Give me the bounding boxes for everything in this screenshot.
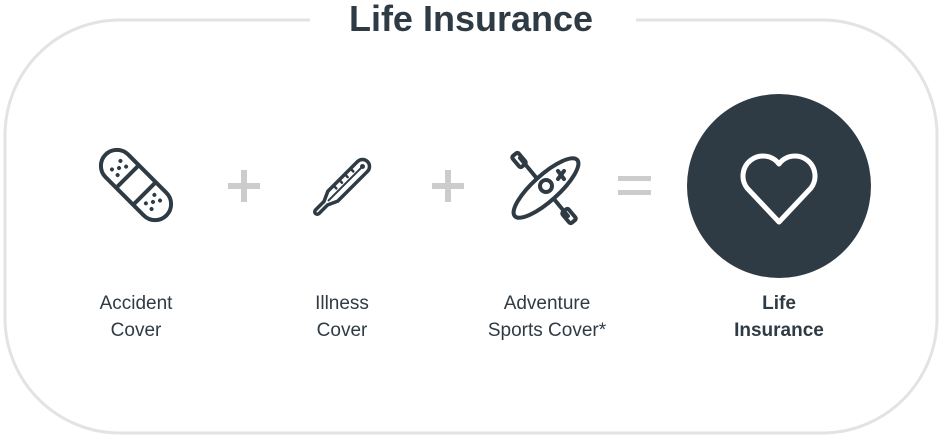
icon: kayak xyxy=(510,150,580,226)
icon: thermometer xyxy=(313,158,372,216)
label: illness: Cover xyxy=(317,320,367,341)
label: illness: Illness xyxy=(315,293,369,314)
icon: heart circle xyxy=(687,94,871,278)
label: accident: Accident xyxy=(100,293,172,314)
plus 2 xyxy=(432,170,464,202)
plus 1 xyxy=(228,170,260,202)
label: accident xyxy=(100,293,172,341)
icon: bandage xyxy=(98,148,174,222)
label: life insurance: Life xyxy=(762,293,796,314)
label: life insurance xyxy=(734,293,824,341)
label: accident: Cover xyxy=(111,320,161,341)
label: adventure: Adventure xyxy=(504,293,590,314)
label: life insurance: Insurance xyxy=(734,320,824,341)
equals xyxy=(618,176,651,195)
label: adventure: Sports Cover* xyxy=(488,320,606,341)
label: adventure xyxy=(488,293,606,341)
label: illness xyxy=(315,293,369,341)
